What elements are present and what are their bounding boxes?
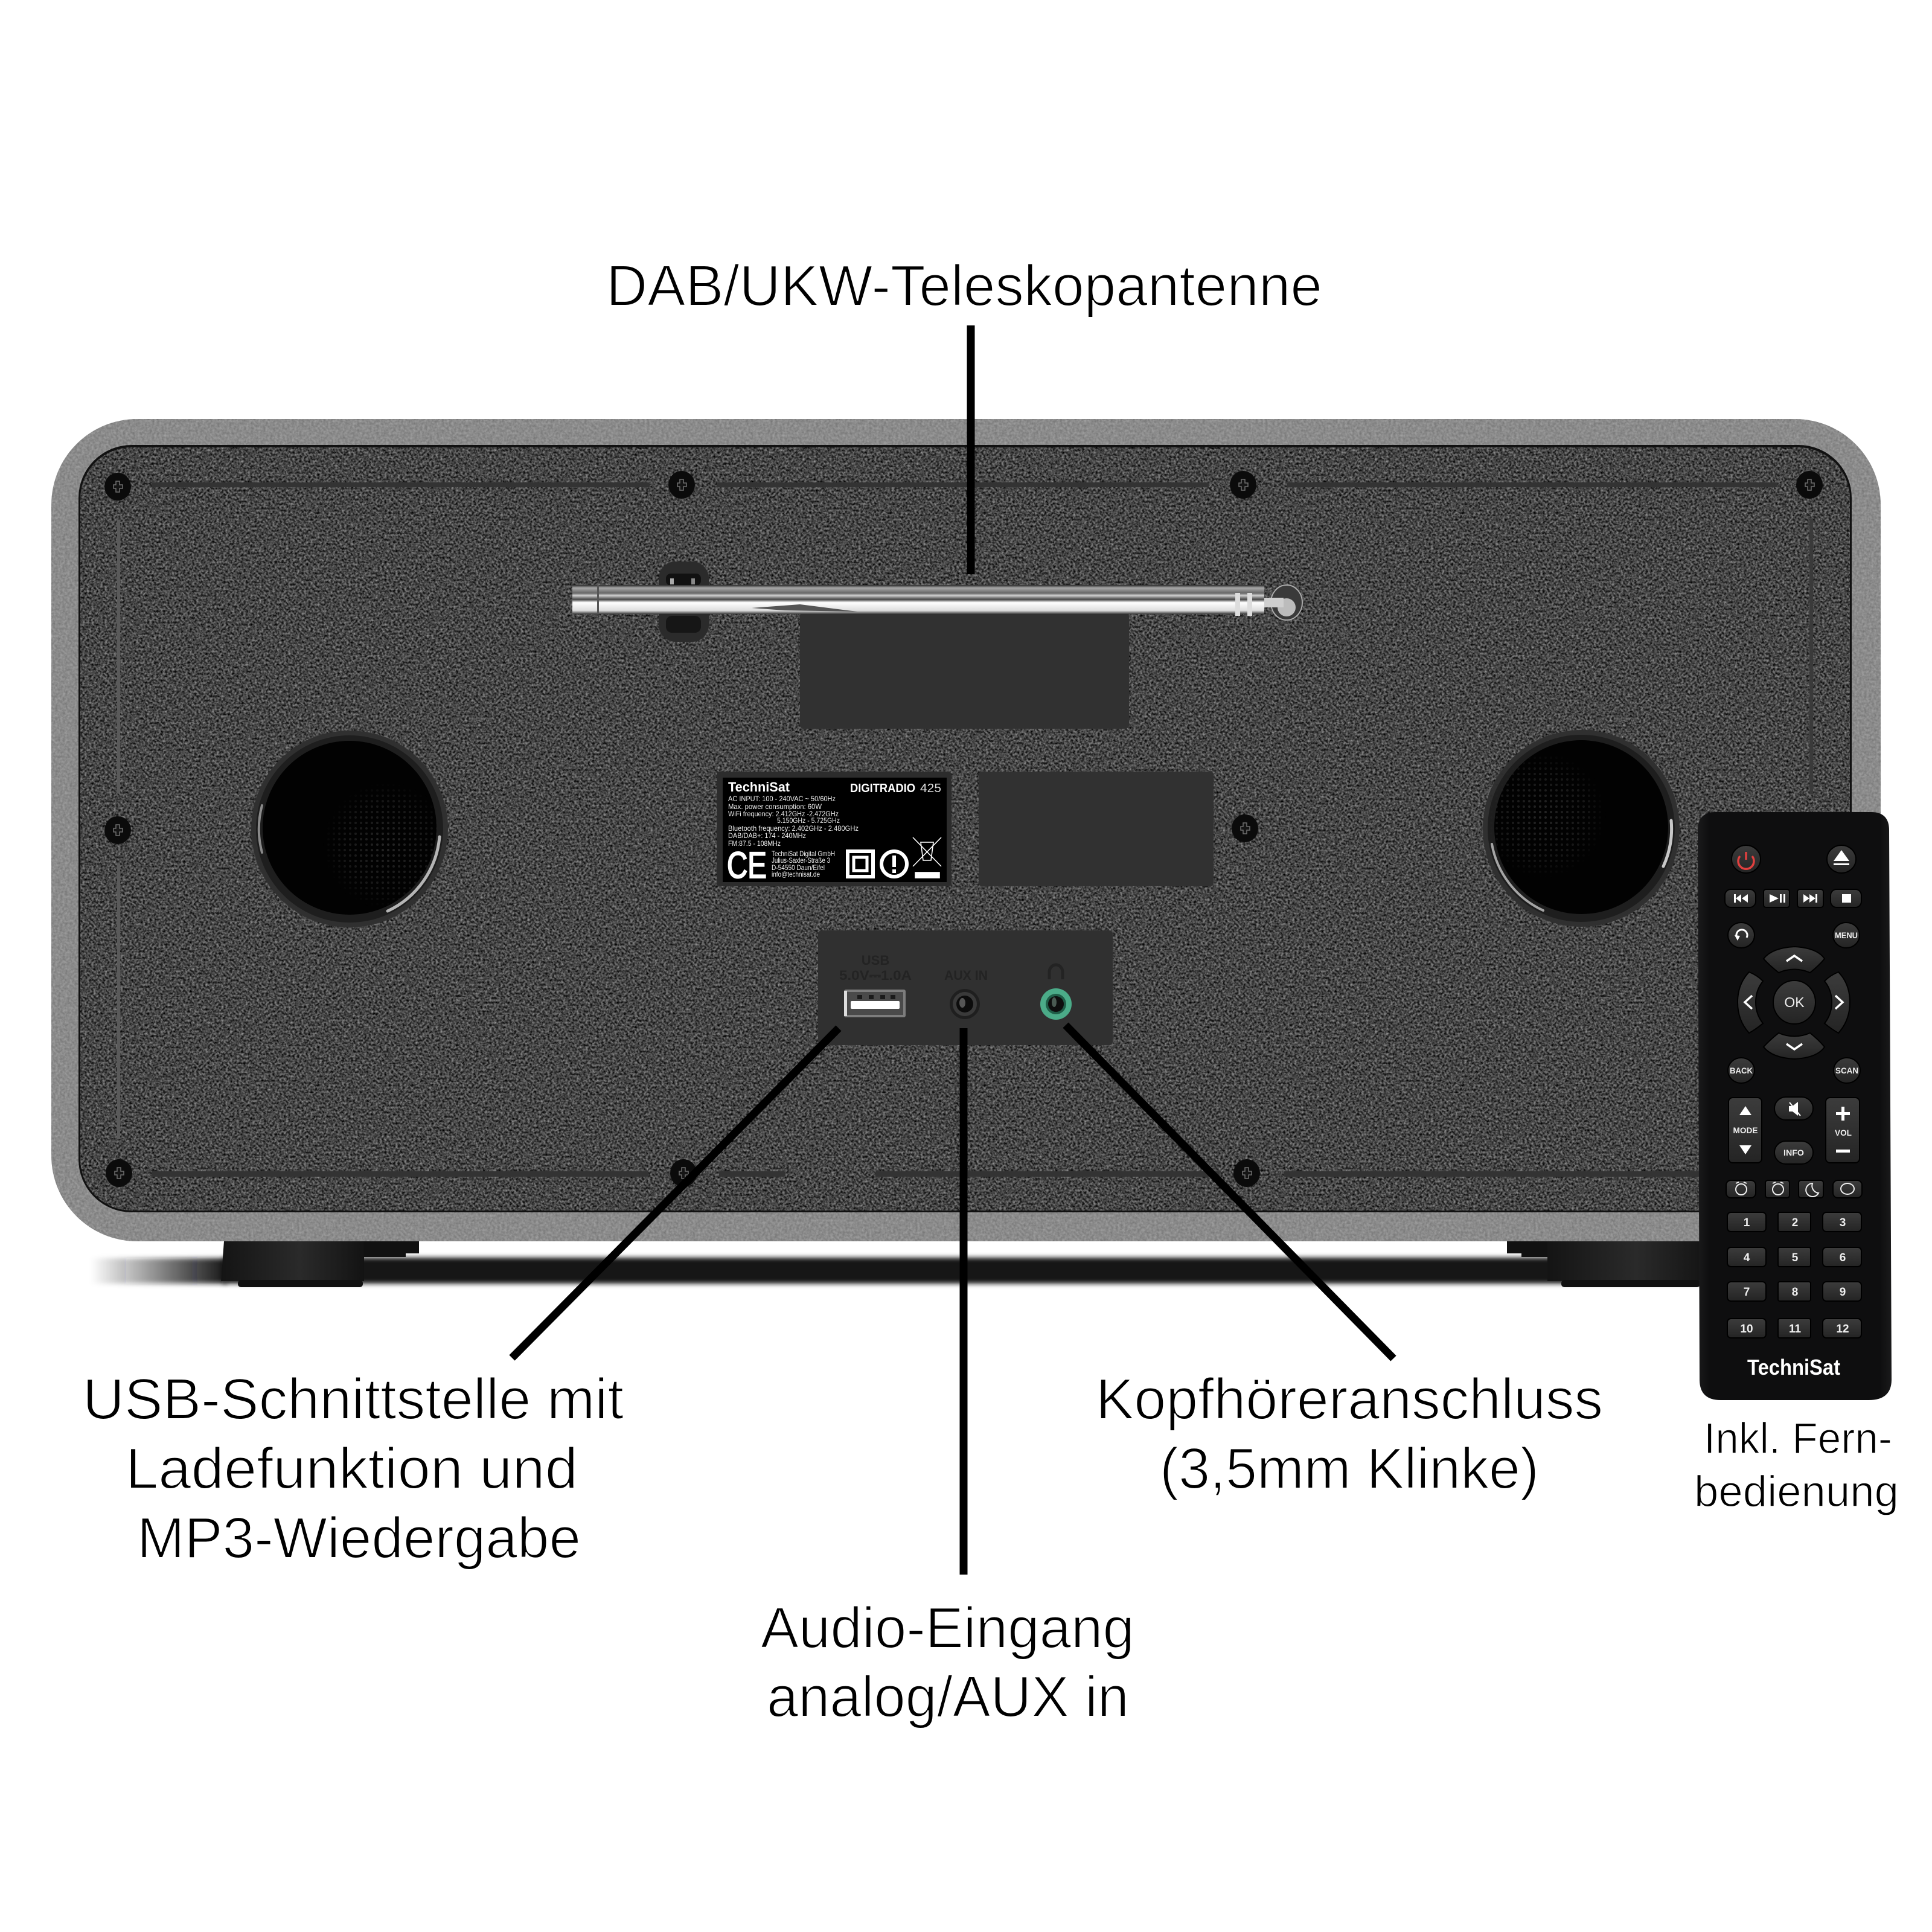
button: mute [1774,1097,1813,1120]
antenna clip [659,561,709,642]
icon: class II [848,851,873,877]
embossed port labels: USB [862,953,889,968]
blank cover plate [979,772,1214,886]
number labels: 3 [1840,1217,1846,1229]
label specifications: AC INPUT: 100 - 240VAC ~ 50/60Hz [728,795,836,803]
button: back: BACK [1730,1066,1753,1075]
manufacturer address: TechniSat Digital GmbH [772,849,835,858]
right speaker port [1483,730,1680,927]
rocker: mode: MODE [1733,1125,1758,1135]
button: menu: MENU [1835,930,1858,940]
number labels: 12 [1836,1323,1849,1335]
heading: antenna: DAB/UKW-Teleskopantenne [606,254,1322,318]
callout: USB [83,1367,624,1570]
rocker: volume: VOL [1835,1128,1852,1137]
floor shadow [91,1258,1721,1284]
right foot [1507,1241,1709,1287]
cover plate under antenna [800,613,1129,729]
rocker: volume [1826,1098,1860,1163]
number keys [1727,1212,1861,1338]
icons: transport [1734,894,1851,903]
callout: remote: bedienung [1694,1468,1899,1516]
label model: DIGITRADIO [850,782,915,795]
connector panel [818,930,1113,1045]
callout: headphones [1096,1367,1603,1501]
screws [104,471,1823,1187]
label specifications: 5.150GHz - 5.725GHz [777,816,840,825]
callout: headphones: (3,5mm Klinke) [1160,1436,1539,1501]
navigation pad [1738,947,1850,1059]
button: scan [1834,1058,1860,1083]
number labels: 9 [1840,1286,1846,1299]
rocker: mode [1729,1098,1762,1163]
button: info [1774,1141,1813,1164]
callout: USB: Ladefunktion und [126,1436,578,1501]
label specifications: Max. power consumption: 60W [728,802,822,811]
embossed port labels [839,953,988,983]
headphone jack [1040,988,1072,1020]
label brand: TechniSat [728,779,790,795]
icons: function keys [1736,1182,1854,1197]
callout: remote [1694,1415,1899,1516]
function keys [1726,1180,1862,1198]
rating label [717,772,952,886]
button: repeat [1728,923,1754,948]
manufacturer address [772,849,835,878]
icon: headphones [1049,965,1063,979]
manufacturer address: info@technisat.de [772,870,820,878]
left speaker port [251,731,448,927]
pointer: AUX [960,1028,967,1575]
AUX jack [950,989,980,1019]
embossed port labels: AUX IN [944,968,988,983]
pointer: USB [512,1028,839,1358]
USB port [844,990,906,1017]
button: info: INFO [1783,1148,1804,1157]
number labels: 11 [1789,1323,1801,1335]
label specifications: FM:87.5 - 108MHz [728,839,781,848]
callout: audio input [761,1596,1134,1729]
button: scan: SCAN [1835,1066,1858,1075]
transport buttons [1725,889,1861,907]
number labels: 8 [1792,1286,1798,1299]
number labels: 10 [1740,1323,1753,1335]
callout: USB: USB-Schnittstelle mit [83,1367,624,1431]
remote brand: TechniSat [1747,1355,1840,1380]
button: eject [1827,845,1856,873]
remote control [1698,812,1892,1400]
label specifications: DAB/DAB+: 174 - 240MHz [728,831,806,840]
number labels: 4 [1744,1252,1750,1264]
pointer: antenna [967,325,974,574]
radio housing [51,419,1881,1241]
callout: audio input: Audio-Eingang [761,1596,1134,1660]
icon: WEEE bin [913,837,941,878]
number labels [1740,1217,1849,1335]
button: power [1732,845,1761,873]
icon: attention [881,851,907,877]
number labels: 6 [1840,1252,1846,1264]
label specifications: WiFi frequency: 2.412GHz -2.472GHz [728,810,839,818]
pointer: headphones [1066,1025,1393,1358]
CE mark: CE [727,845,767,886]
number labels: 7 [1744,1286,1750,1299]
button: back [1728,1058,1754,1083]
panel grooves [117,482,1813,1177]
telescopic antenna [572,585,1302,620]
back panel [78,445,1852,1212]
navigation pad: OK [1784,994,1805,1010]
label specifications: Bluetooth frequency: 2.402GHz - 2.480GHz [728,824,859,833]
callout: audio input: analog/AUX in [767,1665,1129,1729]
rating label: 425 [920,782,941,795]
left foot [221,1241,419,1287]
embossed port labels: 5.0V⎓1.0A [839,968,912,983]
button: menu [1833,923,1860,948]
callout: USB: MP3-Wiedergabe [137,1506,581,1570]
manufacturer address: D-54550 Daun/Eifel [772,863,825,872]
callout: remote: Inkl. Fern- [1704,1415,1892,1463]
label specifications [728,795,859,848]
number labels: 5 [1792,1252,1799,1264]
manufacturer address: Julius-Saxler-Straße 3 [772,856,830,865]
callout: headphones: Kopfhöreranschluss [1096,1367,1603,1431]
number labels: 1 [1744,1217,1750,1229]
number labels: 2 [1792,1217,1798,1229]
